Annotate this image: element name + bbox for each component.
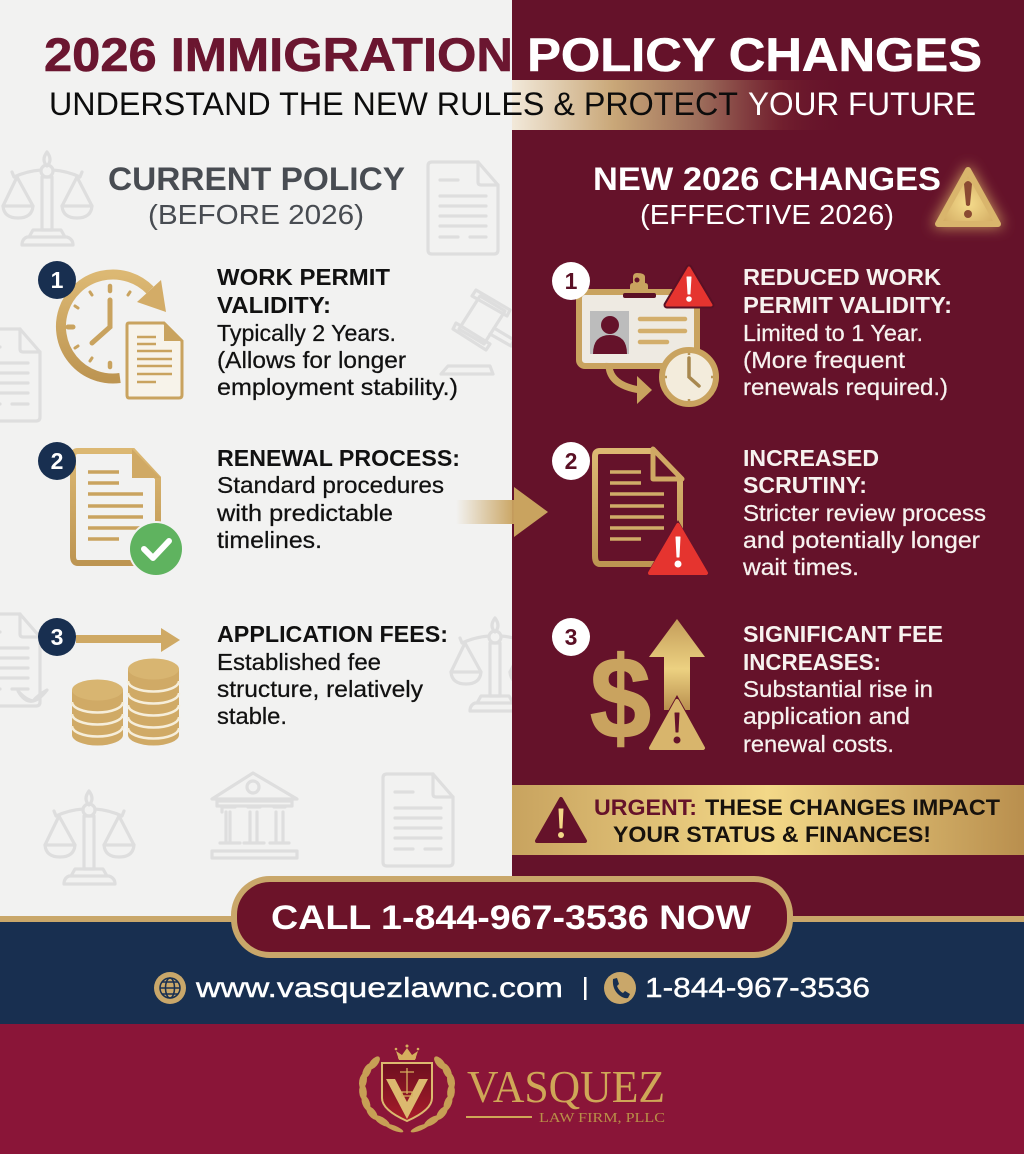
text block: INCREASES:: [743, 649, 881, 675]
icon: clock and document: [61, 274, 182, 398]
text block: REDUCED WORK: [743, 264, 941, 290]
text block: structure, relatively: [217, 676, 424, 702]
text block: [743, 264, 952, 400]
left panel background: [0, 0, 512, 916]
text block: SCRUTINY:: [743, 472, 867, 498]
text block: INCREASED: [743, 445, 879, 471]
logo: Vasquez Law Firm: LAW FIRM, PLLC: [539, 1111, 665, 1126]
text block: Limited to 1 Year.: [743, 320, 923, 346]
right panel background: [512, 0, 1024, 916]
icon: glowing warning triangle: [937, 170, 999, 224]
navy contact band: [0, 922, 1024, 1024]
callout: urgent banner: THESE CHANGES IMPACT: [705, 795, 1001, 820]
icon: urgent warning: [537, 799, 585, 841]
subtitle gold band: [512, 80, 850, 130]
text block: VALIDITY:: [217, 292, 331, 318]
text block: wait times.: [742, 554, 859, 580]
text block: PERMIT VALIDITY:: [743, 292, 952, 318]
heading: new 2026 changes: (EFFECTIVE 2026): [640, 199, 894, 230]
icon: document with alert: [595, 449, 711, 577]
text block: (More frequent: [743, 347, 906, 373]
arrow: current to new: [456, 487, 548, 537]
website: www.vasquezlawnc.com: [195, 972, 563, 1003]
text block: RENEWAL PROCESS:: [217, 445, 460, 471]
text block: Standard procedures: [217, 472, 444, 498]
text block: Substantial rise in: [743, 676, 933, 702]
heading: new 2026 changes: NEW 2026 CHANGES: [593, 161, 941, 197]
logo laurel: [358, 1054, 456, 1134]
number badge 3: 3: [565, 624, 577, 650]
callout: urgent banner: YOUR STATUS & FINANCES!: [613, 822, 931, 847]
subtitle: UNDERSTAND THE NEW RULES & PROTECT: [49, 86, 738, 122]
icon: arrow and coin stacks: [72, 628, 180, 746]
text block: [217, 621, 448, 729]
callout: urgent banner: URGENT:: [594, 795, 697, 820]
callout: urgent banner: [512, 785, 1024, 855]
number badge 2: 2: [565, 448, 577, 474]
number badge 3: [38, 618, 76, 656]
text block: timelines.: [217, 527, 322, 553]
call to action button: [234, 879, 790, 955]
text block: APPLICATION FEES:: [217, 621, 448, 647]
icon: phone: [604, 972, 636, 1004]
logo crown: [395, 1044, 419, 1060]
title: 2026 IMMIGRATION POLICY CHANGES: [44, 28, 982, 81]
panel: new item 3: [552, 618, 943, 763]
separator: [584, 977, 586, 1000]
subtitle: YOUR FUTURE: [748, 86, 976, 122]
text block: SIGNIFICANT FEE: [743, 621, 943, 647]
text block: [742, 445, 986, 580]
text block: [217, 264, 458, 400]
heading: current policy: (BEFORE 2026): [148, 199, 364, 230]
panel: current item 1: [38, 261, 458, 400]
logo wordmark: VASQUEZ: [467, 1061, 665, 1112]
panel: new item 2: [552, 442, 986, 580]
call to action button: CALL 1-844-967-3536 NOW: [271, 899, 752, 937]
logo shield: [382, 1063, 432, 1121]
text block: (Allows for longer: [217, 347, 406, 373]
phone number: 1-844-967-3536: [645, 972, 870, 1003]
logo: Vasquez Law Firm: [358, 1044, 665, 1134]
text block: stable.: [217, 703, 287, 729]
text block: Established fee: [217, 649, 381, 675]
heading: current policy: [108, 161, 405, 230]
gold divider: [0, 916, 1024, 922]
icon: globe: [154, 972, 186, 1004]
text block: [216, 445, 460, 553]
number badge 2: 2: [51, 448, 63, 474]
text block: renewal costs.: [743, 731, 894, 757]
number badge 3: [552, 618, 590, 656]
panel: new item 1: [552, 262, 952, 404]
text block: renewals required.): [743, 374, 948, 400]
text block: Typically 2 Years.: [217, 320, 396, 346]
number badge 1: 1: [51, 267, 64, 293]
heading: new 2026 changes: [593, 161, 941, 230]
text block: and potentially longer: [743, 527, 980, 553]
icon: dollar, up arrow and warning: [590, 619, 709, 763]
number badge 1: 1: [565, 268, 578, 294]
text block: WORK PERMIT: [217, 264, 390, 290]
number badge 1: [38, 261, 76, 299]
panel: current item 2: [38, 442, 460, 577]
number badge 2: [552, 442, 590, 480]
text block: employment stability.): [217, 374, 458, 400]
text block: Stricter review process: [743, 500, 986, 526]
panel: current item 3: [38, 618, 448, 746]
contact row: [154, 972, 870, 1004]
text block: [743, 621, 943, 757]
text block: with predictable: [216, 500, 393, 526]
number badge 2: [38, 442, 76, 480]
burgundy footer band: [0, 1024, 1024, 1154]
icon: document with check: [73, 449, 184, 577]
number badge 1: [552, 262, 590, 300]
icon: dollar, up arrow and warning: $: [590, 633, 651, 763]
watermark icons: [0, 152, 540, 884]
number badge 3: 3: [51, 624, 63, 650]
icon: ID card, alert and clock: [579, 268, 716, 404]
heading: current policy: CURRENT POLICY: [108, 161, 405, 197]
text block: application and: [743, 703, 910, 729]
